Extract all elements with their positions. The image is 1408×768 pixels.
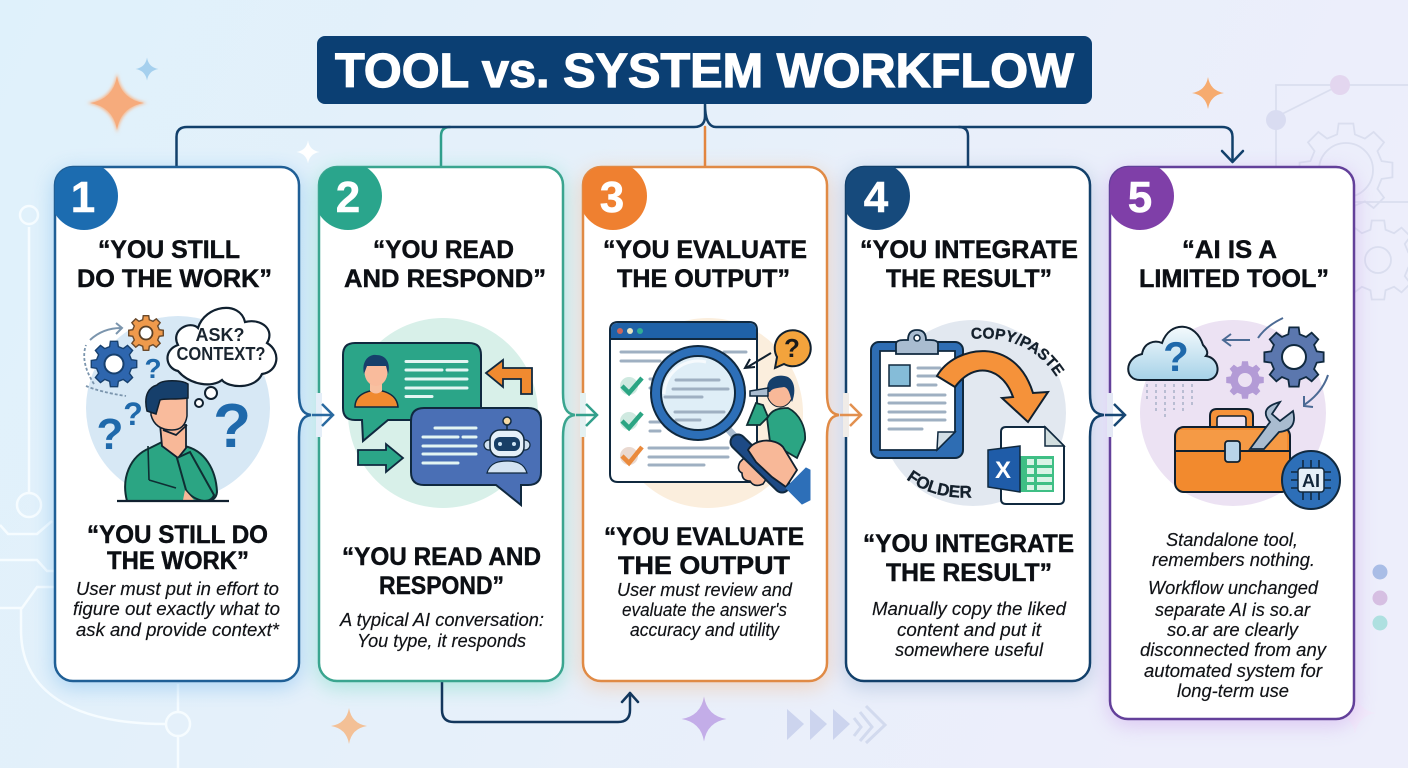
card 1 description — [73, 579, 280, 640]
card 5 heading: “AI IS A — [1182, 236, 1277, 264]
card 1 subheading — [87, 521, 268, 575]
arrow: card 3 to card 4 — [840, 393, 861, 437]
card 4 number badge: 4 — [864, 173, 889, 222]
card 4 frame — [846, 167, 1104, 681]
card 5 description: separate AI is so.ar — [1155, 600, 1311, 620]
icon: thinking person: ASK? — [196, 325, 244, 345]
card 4 subheading: “YOU INTEGRATE — [863, 530, 1074, 558]
icon: copy paste to spreadsheet: X — [995, 457, 1011, 484]
panel: card 4 — [844, 166, 1104, 682]
icon: magnifier over checklist: ? — [784, 333, 800, 363]
card 2 subheading — [342, 543, 541, 600]
card 3 subheading: “YOU EVALUATE — [604, 523, 804, 551]
card 3 number badge: 3 — [600, 173, 624, 222]
card 2 description: You type, it responds — [357, 631, 526, 651]
card 2 heading: AND RESPOND” — [344, 265, 546, 293]
card 3 number badge — [583, 167, 647, 230]
card 1 description: figure out exactly what to — [73, 599, 280, 619]
icon: thinking person: ? — [213, 392, 251, 461]
icon: magnifier over checklist — [610, 318, 811, 508]
icon: toolbox with cloud and gears: ? — [1163, 333, 1189, 380]
icon: thinking person — [84, 308, 276, 501]
background circuit lines left — [0, 206, 190, 768]
card 5 description: Workflow unchanged — [1148, 578, 1319, 598]
card 2 number badge: 2 — [336, 173, 360, 222]
card 3 subheading — [604, 523, 804, 580]
card 5 description: disconnected from any — [1140, 640, 1327, 660]
card 4 heading: THE RESULT” — [886, 265, 1052, 293]
card 3 heading: THE OUTPUT” — [617, 265, 790, 293]
icon: thinking person: ? — [123, 396, 143, 432]
panel: card 1 — [50, 162, 311, 681]
card 3 heading — [603, 236, 807, 293]
card 1 subheading: “YOU STILL DO — [87, 521, 268, 549]
icon: copy paste to spreadsheet: COPY/PASTE — [971, 328, 1065, 377]
card 5 heading — [1139, 236, 1329, 293]
connector: title to cards — [176, 104, 1243, 167]
card 3 description — [617, 580, 793, 640]
card 4 heading: “YOU INTEGRATE — [860, 236, 1078, 264]
card 2 number badge — [319, 167, 382, 230]
card 2 heading — [344, 236, 546, 293]
icon: copy paste to spreadsheet — [870, 320, 1066, 506]
card 4 heading — [860, 236, 1078, 293]
card 1 subheading: THE WORK” — [107, 547, 249, 575]
card 4 description — [872, 599, 1067, 660]
card 1 description: ask and provide context* — [76, 620, 280, 640]
card 5 description: remembers nothing. — [1152, 550, 1315, 570]
arrow: card 1 to card 2 — [312, 393, 333, 437]
connector: card 2 to card 3 — [442, 681, 638, 722]
card 1 number badge: 1 — [71, 173, 95, 222]
card 4 subheading: THE RESULT” — [886, 559, 1052, 587]
panel: card 3 — [579, 162, 839, 681]
card 5 description — [1140, 530, 1327, 701]
card 1 frame — [55, 167, 311, 681]
icon: thinking person: ? — [97, 410, 123, 459]
card 2 subheading: “YOU READ AND — [342, 543, 541, 571]
card 2 frame — [319, 167, 575, 681]
card 3 subheading: THE OUTPUT — [618, 552, 790, 580]
card 3 description: accuracy and utility — [630, 620, 780, 640]
arrow: card 4 to card 5 — [1105, 393, 1125, 437]
icon: copy paste to spreadsheet: FOLDER — [906, 470, 972, 498]
card 4 description: somewhere useful — [895, 640, 1044, 660]
card 4 number badge — [846, 167, 910, 230]
card 5 number badge: 5 — [1128, 173, 1152, 222]
icon: toolbox with cloud and gears — [1128, 318, 1340, 509]
card 3 description: evaluate the answer's — [622, 600, 787, 620]
card 5 description: Standalone tool, — [1166, 530, 1298, 550]
card 2 description — [339, 610, 544, 651]
card 1 heading: “YOU STILL — [98, 236, 240, 264]
decorative chevrons — [787, 706, 885, 743]
card glows — [53, 170, 1356, 726]
title banner: TOOL vs. SYSTEM WORKFLOW — [335, 45, 1075, 98]
decorative dots — [1372, 564, 1388, 630]
card 1 heading: DO THE WORK” — [77, 265, 272, 293]
card 5 description: automated system for — [1144, 661, 1323, 681]
icon: thinking person: ? — [144, 353, 162, 384]
card 3 heading: “YOU EVALUATE — [603, 236, 807, 264]
card 5 heading: LIMITED TOOL” — [1139, 265, 1329, 293]
card 1 description: User must put in effort to — [76, 579, 279, 599]
card 5 description: so.ar are clearly — [1167, 620, 1299, 640]
card 3 description: User must review and — [617, 580, 793, 600]
card 4 description: content and put it — [897, 620, 1042, 640]
icon: toolbox with cloud and gears: AI — [1302, 471, 1320, 491]
card 2 description: A typical AI conversation: — [339, 610, 544, 630]
card 4 description: Manually copy the liked — [872, 599, 1067, 619]
card 2 subheading: RESPOND” — [379, 572, 504, 600]
arrow: card 2 to card 3 — [576, 393, 597, 437]
card 5 description: long-term use — [1177, 681, 1289, 701]
card 1 number badge — [55, 167, 118, 230]
icon: chat conversation — [343, 318, 541, 508]
panel: card 2 — [314, 162, 575, 681]
panel: card 5 — [1106, 162, 1354, 719]
card 4 subheading — [863, 530, 1074, 587]
background circuit and gears right — [1266, 75, 1408, 300]
icon: thinking person: CONTEXT? — [176, 344, 266, 364]
card 1 heading — [77, 236, 272, 293]
card 5 frame — [1110, 167, 1354, 719]
card 2 heading: “YOU READ — [373, 236, 514, 264]
card 3 frame — [583, 167, 839, 681]
card 5 number badge — [1110, 167, 1174, 230]
